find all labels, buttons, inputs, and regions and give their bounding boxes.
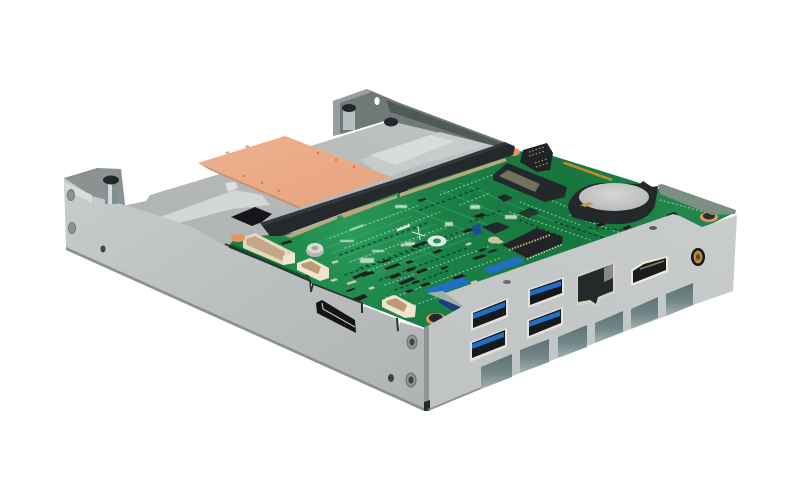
ribbon connector xyxy=(561,162,613,181)
medium chips xyxy=(472,194,540,244)
coin cell battery holder xyxy=(568,181,658,224)
vent openings xyxy=(481,283,693,389)
left ribbon connector xyxy=(243,233,295,265)
USB ports xyxy=(470,277,564,362)
white logo and label xyxy=(397,224,446,246)
USB port top left xyxy=(471,298,508,331)
left side wall xyxy=(64,168,424,411)
wall holes xyxy=(68,190,417,387)
capacitor can xyxy=(306,243,324,257)
white silkscreen marks xyxy=(340,205,517,263)
rear HDMI port xyxy=(631,256,668,286)
pin header xyxy=(520,143,553,172)
dense silkscreen and solder specks xyxy=(330,172,715,305)
tray floor xyxy=(122,121,512,250)
dark slit along wall xyxy=(225,244,362,303)
back bracket xyxy=(333,89,515,154)
front top holes xyxy=(503,226,657,284)
small white connector upper xyxy=(297,258,329,281)
copper heat spreader xyxy=(198,136,391,209)
bracket screw xyxy=(384,118,398,126)
USB port top right xyxy=(528,277,564,308)
front I/O panel xyxy=(424,214,737,411)
lower front shading xyxy=(428,387,481,411)
corner post screw xyxy=(103,176,119,204)
lighter traces xyxy=(310,183,640,273)
blue port connectors xyxy=(425,256,525,314)
small white connector lower xyxy=(382,295,416,318)
M.2 socket xyxy=(493,163,567,202)
gold antenna jack xyxy=(691,248,705,266)
metal tray and back bracket xyxy=(122,89,515,250)
lower wall shading xyxy=(66,247,424,411)
USB port bottom right xyxy=(527,307,563,339)
board front edge xyxy=(228,244,312,284)
tray cut-out shadow xyxy=(231,207,272,226)
right side wall strip xyxy=(658,184,736,215)
small surface mount parts xyxy=(280,189,678,302)
side HDMI port xyxy=(316,300,356,333)
USB port bottom left xyxy=(470,328,507,362)
green circuit board xyxy=(228,143,736,330)
large chip xyxy=(502,228,563,259)
RJ45 port xyxy=(577,262,615,306)
memory slot xyxy=(260,142,515,238)
tray embossed ribs xyxy=(160,132,490,224)
orange screw pads xyxy=(231,148,718,325)
